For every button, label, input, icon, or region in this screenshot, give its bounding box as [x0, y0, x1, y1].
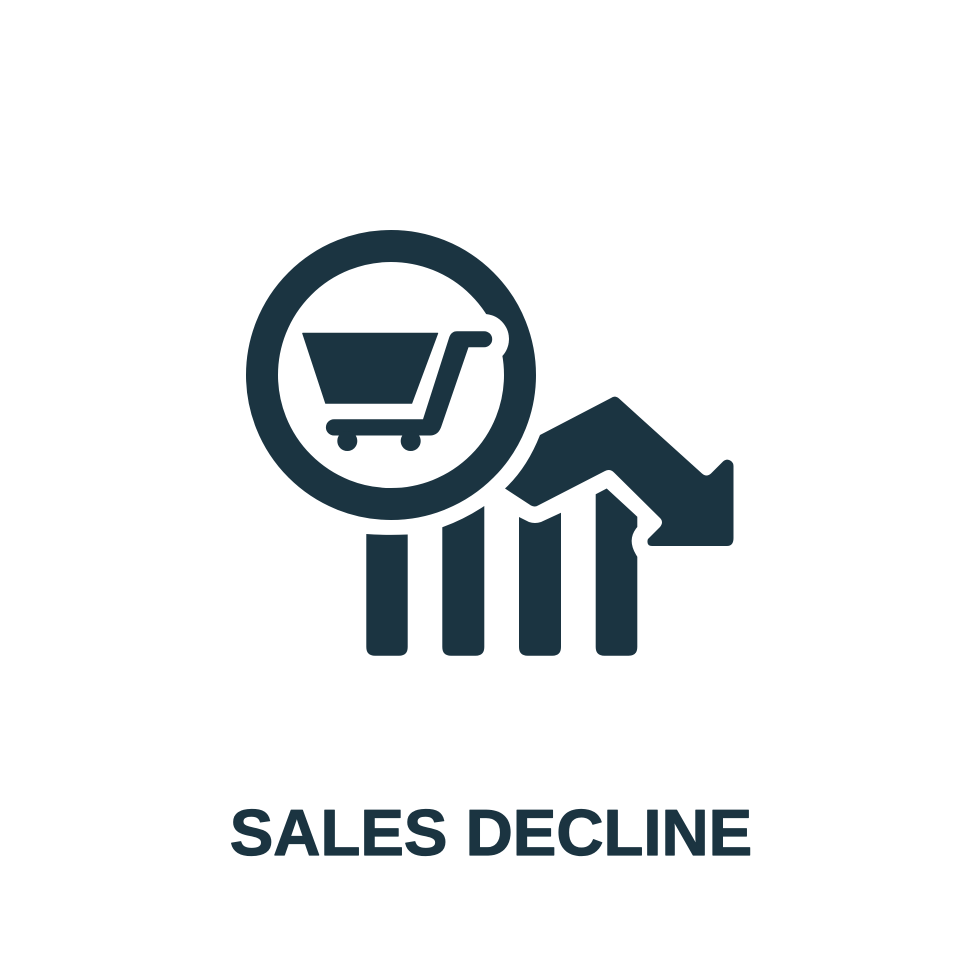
cart handle and base — [326, 331, 492, 436]
title: SALES DECLINE — [230, 797, 752, 869]
bar 4 — [596, 488, 637, 656]
cart left wheel — [337, 431, 357, 451]
bar chart — [366, 488, 637, 656]
cart basket — [303, 333, 438, 403]
icon: shopping cart — [303, 331, 492, 451]
bar 1 — [366, 534, 408, 656]
bar 2 — [442, 506, 484, 656]
bar 3 — [519, 513, 561, 656]
icon: magnifying circle — [262, 246, 520, 504]
cart right wheel — [401, 431, 421, 451]
arrow: downward trend — [505, 397, 734, 546]
